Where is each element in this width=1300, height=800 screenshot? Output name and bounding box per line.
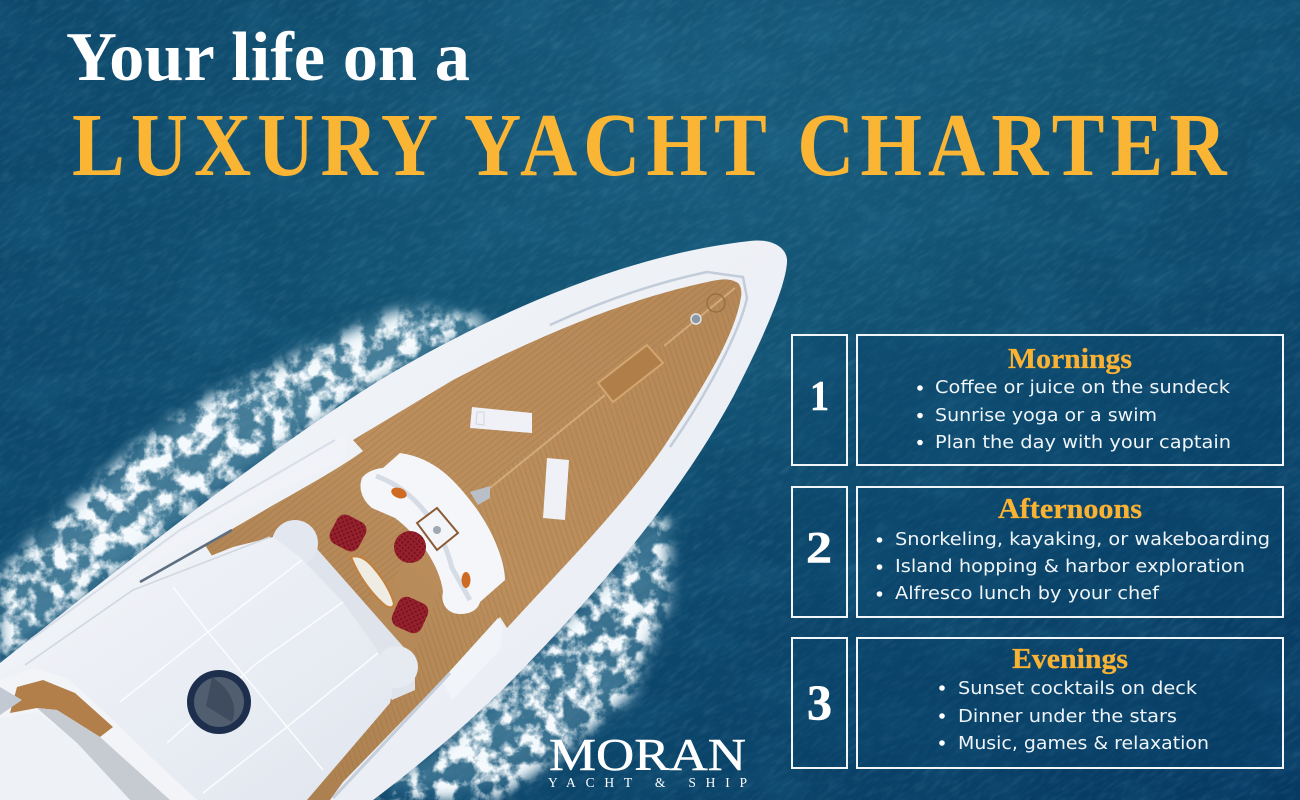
roof skylight: [187, 670, 251, 734]
red pouf cushions: [326, 511, 431, 636]
curved sofa: [360, 453, 505, 614]
bullet list: [877, 530, 1270, 604]
heading: Mornings: [1008, 343, 1132, 375]
bullet list: Dinner under the stars: [958, 707, 1177, 727]
bullet list: Sunset cocktails on deck: [958, 679, 1198, 699]
title: [66, 19, 1227, 195]
coffee table: [417, 508, 458, 550]
step 3 number box: 3: [807, 674, 832, 730]
bullet list: Coffee or juice on the sundeck: [935, 378, 1231, 398]
hull: [0, 240, 787, 800]
upper deck roof: [0, 537, 393, 800]
orange pillows: [390, 486, 408, 500]
step 3 number box: [792, 638, 847, 768]
bullet list: Music, games & relaxation: [958, 734, 1209, 754]
sun loungers: [470, 407, 569, 520]
panel: evenings: [857, 638, 1283, 768]
seating bench along superstructure: [272, 520, 418, 700]
deck hatch: [598, 345, 663, 402]
step 2 number box: 2: [806, 523, 832, 572]
step 2 number box: [792, 487, 847, 617]
step 1 number box: 1: [810, 374, 829, 420]
logo: Moran Yacht & Ship: MORAN: [549, 729, 746, 780]
panel: mornings: [857, 335, 1283, 465]
heading: Afternoons: [998, 493, 1142, 525]
bullet list: Sunrise yoga or a swim: [935, 406, 1157, 426]
logo: Moran Yacht & Ship: YACHT & SHIP: [548, 775, 747, 790]
side notch and walkway: [110, 432, 348, 595]
bullet list: Plan the day with your captain: [935, 433, 1231, 453]
panel: afternoons: [857, 487, 1283, 617]
deck centre seam: [490, 288, 735, 488]
aft deck and lower roof: [0, 668, 197, 800]
bow railing: [550, 272, 747, 447]
bullet list: Island hopping & harbor exploration: [895, 557, 1245, 577]
side table: [351, 556, 394, 607]
bullet list: [917, 378, 1231, 453]
yacht seen from above: [0, 240, 787, 800]
title line two: LUXURY YACHT CHARTER: [72, 95, 1227, 195]
bullet list: [939, 679, 1209, 754]
foredeck teak: [205, 279, 741, 800]
bow capstan: [691, 314, 701, 324]
title line one: Your life on a: [66, 19, 470, 96]
boat wake foam: [0, 312, 668, 800]
bullet list: Snorkeling, kayaking, or wakeboarding: [895, 530, 1270, 550]
bow hatch: [707, 294, 725, 312]
heading: Evenings: [1012, 643, 1128, 675]
bullet list: Alfresco lunch by your chef: [895, 584, 1160, 604]
starboard notch: [442, 618, 503, 700]
step 1 number box: [792, 335, 847, 465]
